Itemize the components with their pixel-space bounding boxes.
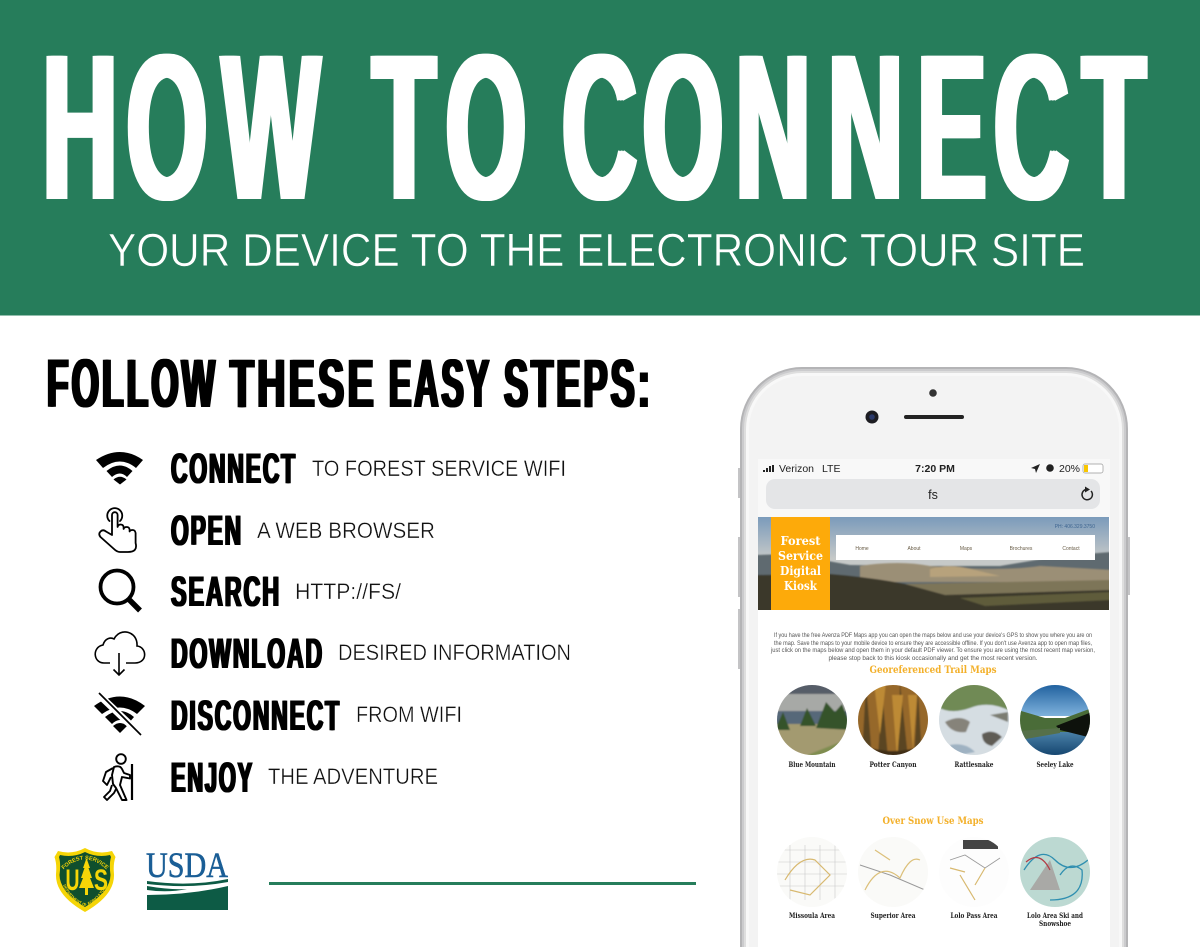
thumbnail: potter canyon: Potter Canyon [870,760,916,769]
phone mockup [738,367,1130,947]
steps heading [47,345,653,422]
status bar [758,459,1110,517]
step: disconnect: FROM WIFI [356,702,462,727]
thumbnail: seeley lake [1018,683,1092,769]
navigation bar [836,535,1095,560]
green line [269,882,696,885]
step: download: DESIRED INFORMATION [338,640,571,665]
step: download [95,630,571,678]
step: enjoy: THE ADVENTURE [268,764,438,789]
website hero [756,517,1111,612]
title: HOW TO CONNECT [42,11,1146,243]
navigation bar: Maps [960,546,973,552]
logo: forest service shield: S [94,864,108,897]
URL bar: fs [928,488,938,502]
step list [94,445,571,802]
steps heading: EASY [389,345,492,422]
step: search: HTTP://FS/ [295,579,402,604]
intro paragraph: just click on the maps below and open them in your default PDF viewer. To ensure you are using the most recent map version, [770,647,1095,654]
step: enjoy [103,754,438,802]
icon: wifi off [94,693,145,735]
step: connect [96,445,566,493]
status bar: Verizon [779,463,814,475]
step: search: SEARCH [171,568,281,616]
step: open [99,507,435,555]
thumbnail: seeley lake: Seeley Lake [1036,760,1074,769]
step: open: A WEB BROWSER [257,518,435,543]
step: connect: TO FOREST SERVICE WIFI [312,456,566,481]
thumbnail: superior area [860,850,924,920]
thumbnail: missoula area [777,845,847,918]
navigation bar: Brochures [1010,546,1033,552]
icon: pointing hand [99,508,136,552]
phone body [740,367,1128,947]
thumbnail: blue mountain: Blue Mountain [788,760,836,769]
navigation bar: Contact [1062,546,1080,552]
steps heading: THESE [230,345,377,422]
intro paragraph [770,632,1095,662]
thumbnail: lolo pass area [950,840,1000,918]
thumbnail: rattlesnake: Rattlesnake [954,760,994,769]
thumbnail: lolo pass area: Lolo Pass Area [950,911,998,920]
orange logo block: Kiosk [784,579,818,593]
front camera and speaker [866,389,964,424]
icon: cloud download [95,632,145,675]
subtitle: YOUR DEVICE TO THE ELECTRONIC TOUR SITE [108,224,1085,276]
logo: forest service shield: U [66,864,80,897]
heading: georeferenced trail maps: Georeferenced Trail Maps [870,665,997,676]
status bar: LTE [822,463,840,475]
navigation bar: About [907,546,921,552]
snow map thumbnails [777,837,1090,928]
icon: magnifying glass [100,570,140,610]
navigation bar: Home [855,546,869,552]
logo: forest service shield [54,848,116,912]
logo: forest service shield: DEPARTMENT OF AGRICULTURE [63,884,105,906]
URL bar [766,479,1100,509]
status bar: 7:20 PM [915,463,955,475]
thumbnail: potter canyon [858,685,928,768]
phone number: PH: 406.329.3750 [1055,524,1095,530]
icon: wifi [96,452,143,484]
step: open: OPEN [171,507,243,555]
steps heading: STEPS: [504,345,653,422]
thumbnail: superior area: Superior Area [870,911,916,920]
intro paragraph: please stop back to this kiosk occasionally and get the most recent version. [828,655,1038,662]
step: download: DOWNLOAD [171,630,324,678]
status bar: 20% [1059,463,1080,475]
thumbnail: lolo area ski and snowshoe [1020,837,1090,928]
thumbnail: blue mountain [777,685,847,767]
step: disconnect: DISCONNECT [171,692,341,740]
intro paragraph: the map. Save the maps to your mobile device to ensure they are accessible offline. If you don't use Avenza app to open map files, [774,640,1092,647]
orange logo block: Service [778,549,823,563]
screen [758,459,1110,947]
step: search [100,568,402,616]
trail map thumbnails [770,680,1092,769]
thumbnail: lolo area ski and snowshoe: Lolo Area Ski and [1027,911,1083,920]
thumbnail: missoula area: Missoula Area [789,911,835,920]
logo: USDA [146,845,228,910]
heading: over snow use maps: Over Snow Use Maps [882,816,984,827]
step: enjoy: ENJOY [171,754,254,802]
phone side buttons [738,468,1130,669]
orange logo block: Forest [780,534,821,548]
orange logo block: Digital [780,564,821,578]
thumbnail: lolo area ski and snowshoe: Snowshoe [1039,919,1071,928]
header banner [0,0,1200,316]
thumbnail: rattlesnake [939,685,1009,767]
orange logo block [771,517,830,610]
steps heading: FOLLOW [47,345,218,422]
step: connect: CONNECT [171,445,297,493]
icon: hiker [103,754,132,800]
logo: forest service shield: FOREST SERVICE [61,856,109,870]
logo: USDA: USDA [146,845,228,885]
intro paragraph: If you have the free Avenza PDF Maps app you can open the maps below and use your device's GPS to show you where you are on [774,632,1092,639]
